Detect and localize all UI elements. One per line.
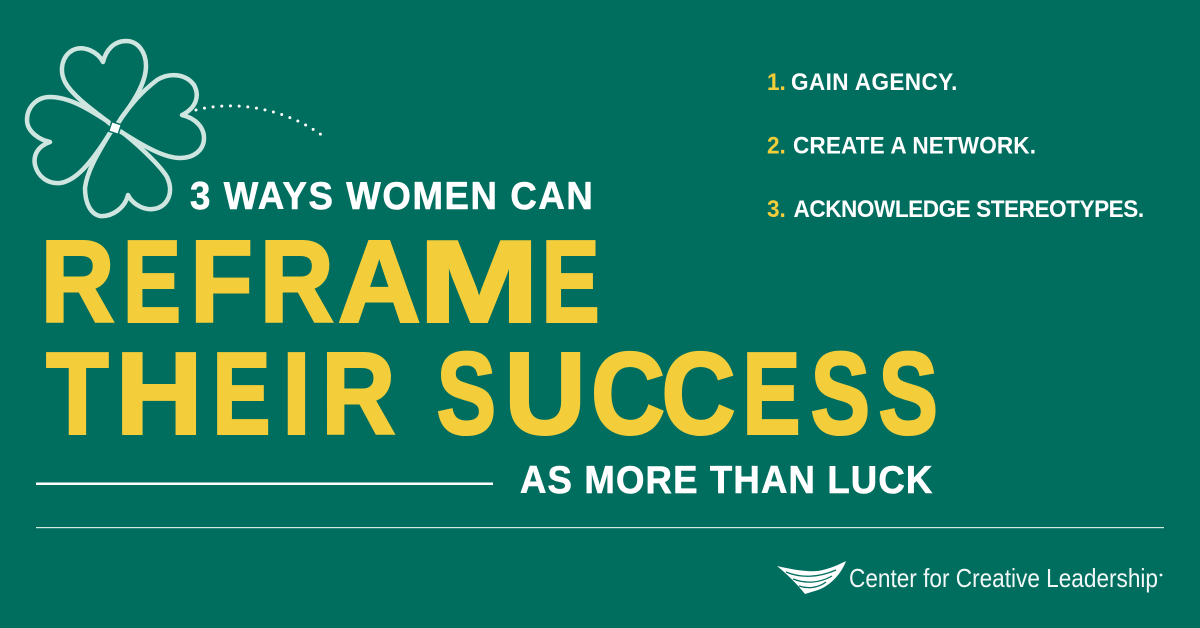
heading: 3 ways women can: 3 WAYS WOMEN CAN bbox=[190, 174, 593, 217]
title: their success: S bbox=[811, 329, 870, 459]
logo: Center for Creative Leadership bbox=[777, 561, 1162, 594]
title: reframe: A bbox=[338, 217, 421, 347]
dotted arc bbox=[196, 106, 323, 136]
list item 2: CREATE A NETWORK. bbox=[793, 132, 1036, 159]
icon: logo wing bbox=[777, 561, 846, 594]
title: reframe: R bbox=[260, 217, 334, 347]
title: reframe: E bbox=[123, 217, 181, 347]
title: their success: I bbox=[282, 329, 311, 459]
title: reframe: E bbox=[542, 217, 600, 347]
title: their success: U bbox=[505, 329, 586, 459]
footer divider bbox=[36, 527, 1164, 528]
list of three ways bbox=[767, 68, 1144, 222]
title: their success: H bbox=[116, 329, 203, 459]
title: reframe: M bbox=[419, 217, 539, 347]
title: their success: S bbox=[879, 329, 938, 459]
list item 3: 3. bbox=[767, 195, 786, 222]
logo wordmark: Center for Creative Leadership bbox=[849, 563, 1158, 593]
subheading: as more than luck: AS MORE THAN LUCK bbox=[520, 458, 932, 501]
title: their success: E bbox=[743, 329, 800, 459]
list item 1: 1. bbox=[767, 68, 786, 95]
title: reframe: R bbox=[41, 217, 114, 347]
title: their success: T bbox=[46, 329, 109, 459]
title: their success: C bbox=[662, 329, 735, 459]
icon: four-leaf clover bbox=[27, 41, 204, 216]
title: reframe: F bbox=[190, 217, 253, 347]
title: their success: R bbox=[321, 329, 395, 459]
list item 3: ACKNOWLEDGE STEREOTYPES. bbox=[794, 195, 1144, 222]
list item 1: GAIN AGENCY. bbox=[791, 68, 957, 95]
title: their success: E bbox=[213, 329, 270, 459]
registered mark bbox=[1160, 574, 1162, 576]
title: their success: C bbox=[591, 329, 665, 459]
rule before subheading bbox=[36, 482, 493, 485]
list item 2: 2. bbox=[767, 132, 786, 159]
title: their success: S bbox=[437, 329, 496, 459]
